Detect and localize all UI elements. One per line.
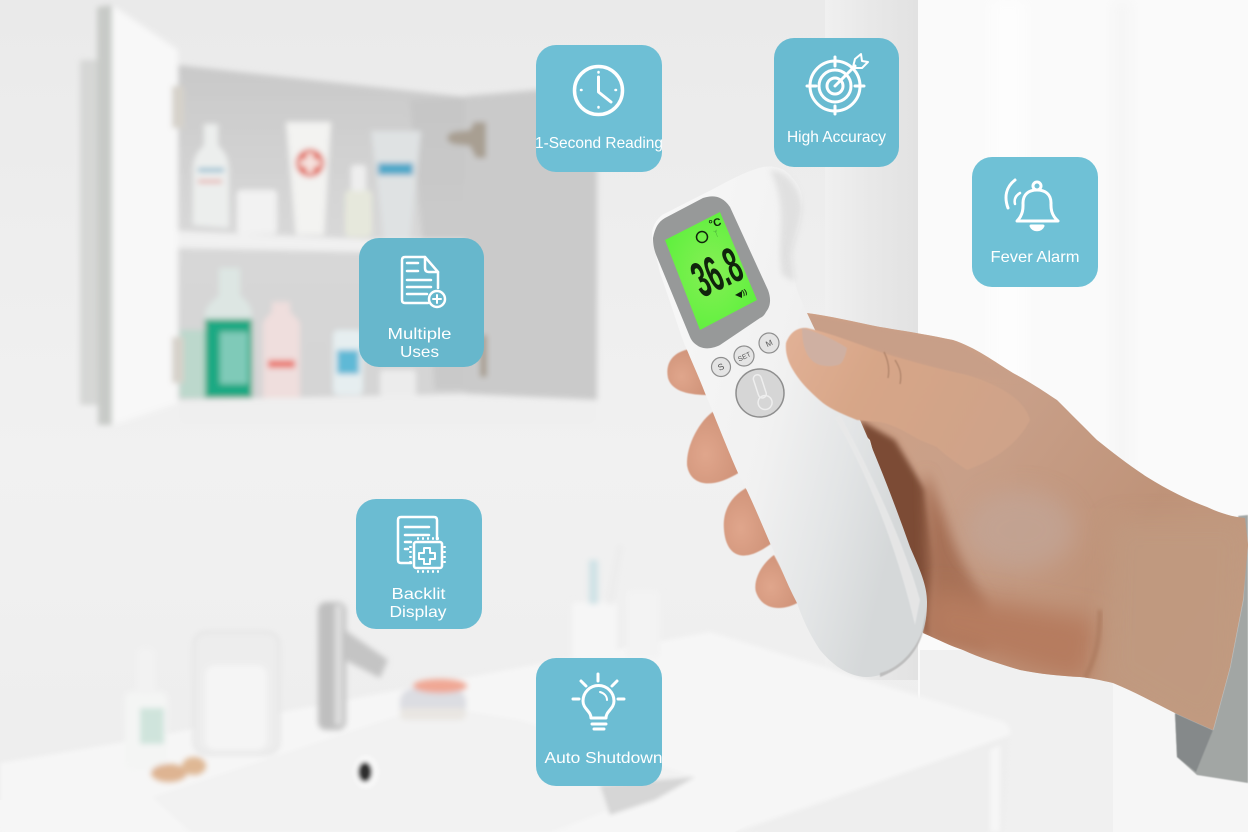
counter top: [0, 632, 1010, 832]
label: Auto Shutdown: [544, 750, 662, 767]
thermometer body: [652, 167, 927, 677]
icon: light bulb: [573, 674, 624, 729]
side buttons: SET: [737, 351, 753, 363]
label: [390, 586, 446, 621]
dark area behind device: [860, 420, 935, 640]
cool palm tone: [971, 493, 1074, 570]
basin: [152, 705, 695, 832]
label: Uses: [400, 344, 439, 361]
side buttons: M: [764, 338, 774, 349]
hinges: [172, 86, 184, 128]
back-of-hand above thumb shade: [808, 313, 957, 342]
head shading: [770, 170, 802, 282]
glass jar: [194, 632, 279, 754]
label: [388, 326, 452, 361]
card: Multiple Uses: [359, 238, 484, 367]
LCD reading: 36.8: [683, 237, 751, 308]
label: Fever Alarm: [990, 249, 1080, 266]
label: Backlit: [392, 586, 446, 603]
green LCD screen: [665, 212, 757, 330]
medicine cabinet: [80, 5, 597, 425]
back fingers: [667, 349, 799, 608]
side seam: [835, 415, 920, 625]
pills: [151, 764, 187, 782]
open right door panel: [465, 85, 597, 400]
soap dispenser and cup: [572, 602, 617, 660]
sleeve cuff: [1175, 515, 1248, 783]
counter base strip: [0, 800, 792, 832]
drain: [354, 756, 378, 788]
display bezel: [653, 196, 770, 348]
LCD reading: )): [741, 289, 748, 297]
counter objects: [125, 545, 660, 782]
palm and wrist: [807, 313, 1248, 730]
white bottle: [125, 692, 167, 770]
bottles upper shelf: [193, 122, 421, 240]
hand and sleeve: [667, 300, 1248, 783]
wrist tone: [1105, 520, 1248, 740]
faucet: [318, 602, 388, 730]
card: 1-Second Reading: [535, 45, 663, 172]
icon: target with arrow: [807, 54, 868, 114]
measure button: [736, 369, 784, 417]
open left door: [112, 5, 178, 425]
label: Multiple: [388, 326, 452, 343]
lower shelf floor: [178, 394, 597, 425]
LCD reading: °C: [708, 216, 723, 231]
cabinet interior: [178, 65, 465, 400]
soap dish: [400, 679, 467, 720]
icon: clock: [574, 66, 622, 114]
bottles lower shelf: [180, 268, 416, 398]
label: High Accuracy: [787, 129, 886, 146]
card: Auto Shutdown: [536, 658, 662, 786]
counter front: [738, 735, 1010, 832]
side buttons: S: [716, 361, 726, 373]
icon: document with chip: [398, 517, 445, 572]
LCD reading: ᛉ: [713, 229, 720, 239]
label: 1-Second Reading: [535, 135, 663, 152]
lower palm warm tone: [925, 590, 1100, 685]
thumb: [786, 328, 1030, 470]
label: Display: [390, 604, 446, 621]
card: Fever Alarm: [972, 157, 1098, 287]
counter front base: [738, 820, 1004, 832]
thermometer: [652, 167, 927, 677]
sink counter: [0, 632, 1010, 832]
wall-side strip: [80, 60, 98, 405]
card: High Accuracy: [774, 38, 899, 167]
knuckle creases: [884, 352, 901, 384]
side buttons: [712, 333, 779, 376]
icon: bell: [1006, 180, 1058, 230]
card: Backlit Display: [356, 499, 482, 629]
icon: document with plus: [402, 257, 445, 307]
thumb nail: [802, 328, 847, 366]
upper shelf: [178, 231, 465, 254]
